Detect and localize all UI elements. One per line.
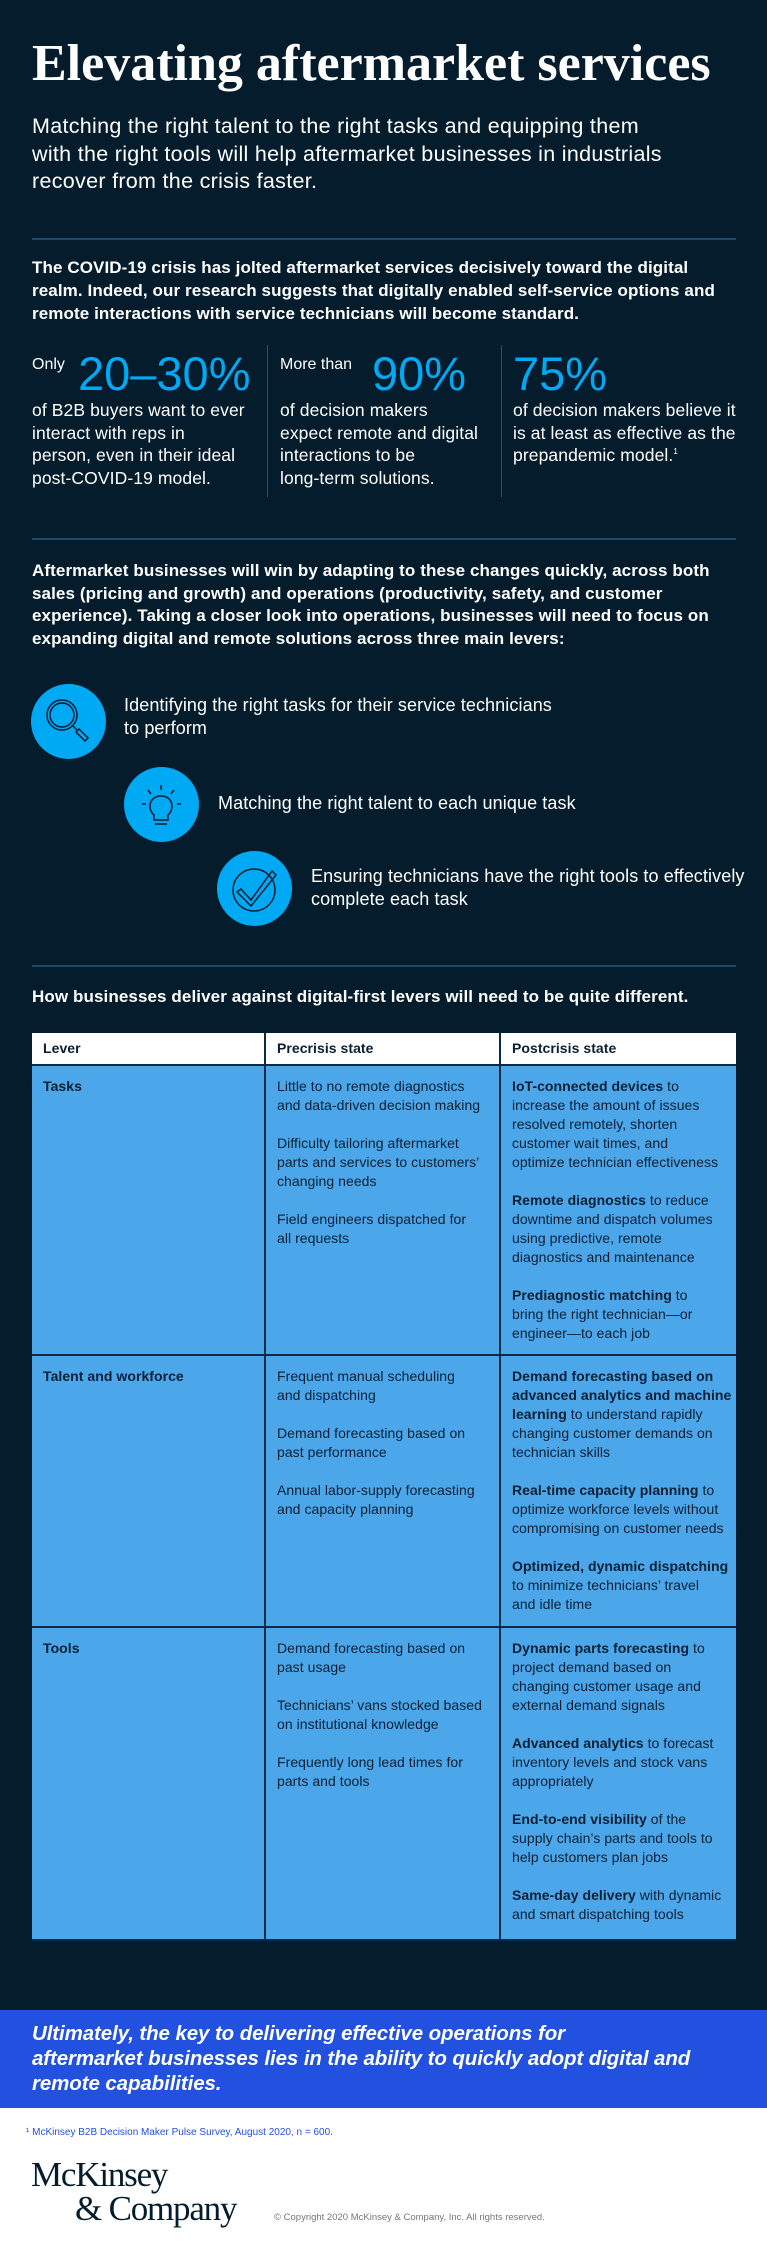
table: levers: engineer—to each job: [512, 1325, 650, 1341]
header row: Lever: [43, 1040, 81, 1056]
copyright: © Copyright 2020 McKinsey & Company, Inc. All rights reserved.: [274, 2212, 545, 2223]
table: levers: Same-day delivery with dynamic: [512, 1887, 721, 1903]
callout: conclusion band: [0, 2010, 767, 2108]
table: levers: appropriately: [512, 1773, 594, 1789]
levers paragraph: expanding digital and remote solutions across three main levers:: [32, 628, 565, 648]
table: levers: on institutional knowledge: [277, 1716, 439, 1732]
table: levers: Postcrisis state: [512, 1040, 616, 1056]
subtitle: recover from the crisis faster.: [32, 169, 317, 193]
intro paragraph: realm. Indeed, our research suggests that digitally enabled self-service options and: [32, 281, 715, 300]
table: levers: parts and tools: [277, 1773, 370, 1789]
table: levers: Advanced analytics to forecast: [512, 1735, 713, 1751]
table: levers: project demand based on: [512, 1659, 671, 1675]
table: levers: bring the right technician—or: [512, 1306, 692, 1322]
stat 2: long-term solutions.: [280, 468, 435, 488]
table: levers: Difficulty tailoring aftermarket: [277, 1135, 459, 1151]
lever 1 text: [124, 695, 552, 738]
table: levers: downtime and dispatch volumes: [512, 1211, 713, 1227]
table: levers: all requests: [277, 1230, 349, 1246]
table: levers: compromising on customer needs: [512, 1520, 724, 1536]
intro paragraph: [32, 258, 715, 323]
icon: check: [217, 851, 292, 926]
table: levers: to minimize technicians’ travel: [512, 1577, 699, 1593]
table: levers: resolved remotely, shorten: [512, 1116, 677, 1132]
table: levers: changing customer demands on: [512, 1425, 713, 1441]
stat 2: interactions to be: [280, 445, 415, 465]
table: levers: optimize workforce levels without: [512, 1501, 718, 1517]
lever 1 text: to perform: [124, 718, 207, 738]
logo: McKinsey: [31, 2155, 167, 2194]
row: talent: [32, 1356, 264, 1626]
stat 1: interact with reps in: [32, 422, 185, 442]
levers paragraph: experience). Taking a closer look into operations, businesses will need to focus on: [32, 606, 709, 625]
table: levers: inventory levels and stock vans: [512, 1754, 707, 1770]
table: levers: customer wait times, and: [512, 1135, 668, 1151]
logo: [31, 2155, 238, 2228]
table: levers: advanced analytics and machine: [512, 1387, 731, 1403]
table: levers: optimize technician effectiveness: [512, 1154, 718, 1170]
table: levers: technician skills: [512, 1444, 610, 1460]
table: levers: IoT-connected devices to: [512, 1078, 679, 1094]
table: levers: using predictive, remote: [512, 1230, 662, 1246]
levers paragraph: sales (pricing and growth) and operations (productivity, safety, and customer: [32, 584, 662, 602]
table: levers: Little to no remote diagnostics: [277, 1078, 465, 1094]
levers paragraph: [32, 561, 710, 648]
stat 2: [280, 347, 478, 488]
subtitle: Matching the right talent to the right tasks and equipping them: [32, 114, 639, 138]
lever 2 text: Matching the right talent to each unique task: [218, 793, 576, 813]
callout: conclusion band: aftermarket businesses lies in the ability to quickly adopt digital and: [32, 2047, 690, 2070]
stat 2: More than: [280, 356, 352, 373]
table: levers: Technicians’ vans stocked based: [277, 1697, 482, 1713]
table: levers: Remote diagnostics to reduce: [512, 1192, 709, 1208]
table: levers: and idle time: [512, 1596, 592, 1612]
stat 1: post-COVID-19 model.: [32, 468, 211, 488]
table: levers: supply chain’s parts and tools to: [512, 1830, 713, 1846]
table: levers: Field engineers dispatched for: [277, 1211, 466, 1227]
table: levers: Optimized, dynamic dispatching: [512, 1558, 728, 1574]
row: tools: Tools: [43, 1640, 80, 1656]
table: levers: and capacity planning: [277, 1501, 413, 1517]
table: levers: [32, 1033, 736, 1941]
table: levers: increase the amount of issues: [512, 1097, 699, 1113]
lever 3 text: complete each task: [311, 889, 468, 909]
stat 2: 90%: [372, 347, 466, 400]
table: levers: parts and services to customers’: [277, 1154, 479, 1170]
table: levers: Demand forecasting based on: [277, 1640, 465, 1656]
stat 3: [513, 347, 736, 465]
table: levers: Demand forecasting based on: [512, 1368, 713, 1384]
lever 3 text: [311, 866, 745, 909]
intro paragraph: The COVID-19 crisis has jolted aftermarket services decisively toward the digital: [32, 258, 688, 277]
table: levers: and dispatching: [277, 1387, 376, 1403]
table: levers: diagnostics and maintenance: [512, 1249, 695, 1265]
stat 3: is at least as effective as the: [513, 422, 736, 442]
icon: magnifier: [31, 684, 106, 759]
title: Elevating aftermarket services: [32, 35, 711, 92]
table: levers: End-to-end visibility of the: [512, 1811, 686, 1827]
table: levers: help customers plan jobs: [512, 1849, 668, 1865]
stat 1: person, even in their ideal: [32, 445, 235, 465]
subtitle: [32, 114, 662, 193]
table: levers: Frequently long lead times for: [277, 1754, 463, 1770]
callout: conclusion band: Ultimately, the key to delivering effective operations for: [32, 2022, 565, 2045]
table: levers: Prediagnostic matching to: [512, 1287, 688, 1303]
table: levers: Annual labor-supply forecasting: [277, 1482, 475, 1498]
icon: light bulb: [124, 767, 199, 842]
subtitle: with the right tools will help aftermarket businesses in industrials: [32, 142, 662, 166]
table: levers: and smart dispatching tools: [512, 1906, 684, 1922]
table: levers: past performance: [277, 1444, 387, 1460]
stat 2: expect remote and digital: [280, 422, 478, 442]
stat 1: 20–30%: [78, 347, 250, 400]
table: levers: Frequent manual scheduling: [277, 1368, 455, 1384]
stat 3: of decision makers believe it: [513, 400, 736, 420]
table: levers: Precrisis state: [277, 1040, 373, 1056]
stat 1: [32, 347, 250, 488]
table: levers: past usage: [277, 1659, 346, 1675]
stat 2: of decision makers: [280, 400, 428, 420]
table: levers: Real-time capacity planning to: [512, 1482, 714, 1498]
footnote: ¹ McKinsey B2B Decision Maker Pulse Survey, August 2020, n = 600.: [26, 2127, 333, 2138]
intro paragraph: remote interactions with service technicians will become standard.: [32, 304, 579, 323]
table heading: How businesses deliver against digital-first levers will need to be quite different.: [32, 987, 688, 1006]
row: tasks: Tasks: [43, 1078, 82, 1094]
callout: conclusion band: remote capabilities.: [32, 2072, 221, 2095]
logo: & Company: [75, 2189, 236, 2228]
table: levers: and data-driven decision making: [277, 1097, 480, 1113]
row: tools: [32, 1628, 264, 1939]
levers paragraph: Aftermarket businesses will win by adapting to these changes quickly, across both: [32, 561, 710, 580]
stat 1: Only: [32, 356, 65, 373]
table: levers: learning to understand rapidly: [512, 1406, 703, 1422]
lever 3 text: Ensuring technicians have the right tools to effectively: [311, 866, 745, 886]
stat 3: 75%: [513, 347, 607, 400]
row: tasks: [32, 1066, 264, 1354]
stat 1: of B2B buyers want to ever: [32, 400, 245, 420]
table: levers: external demand signals: [512, 1697, 665, 1713]
lever 1 text: Identifying the right tasks for their service technicians: [124, 695, 552, 715]
table: levers: changing needs: [277, 1173, 377, 1189]
table: levers: Dynamic parts forecasting to: [512, 1640, 705, 1656]
table: levers: Demand forecasting based on: [277, 1425, 465, 1441]
stat 3: prepandemic model.1: [513, 445, 678, 465]
table: levers: changing customer usage and: [512, 1678, 701, 1694]
header row: [32, 1033, 264, 1064]
row: talent: Talent and workforce: [43, 1368, 184, 1384]
